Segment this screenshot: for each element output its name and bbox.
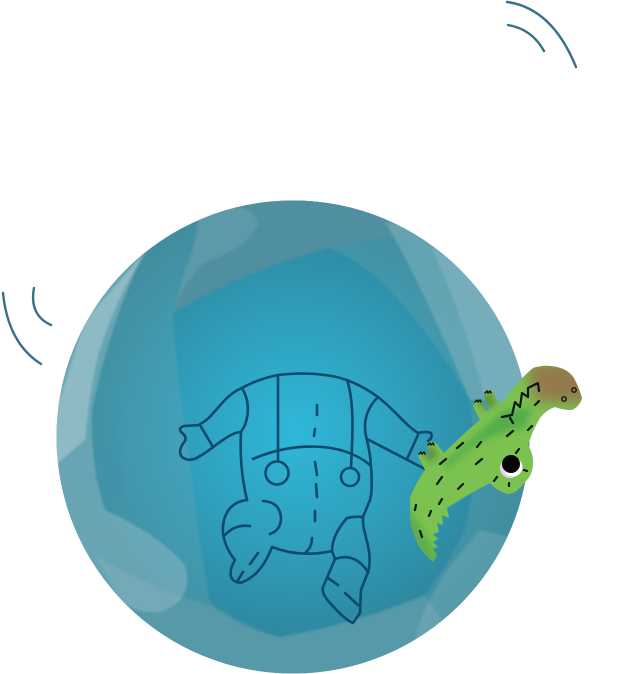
bubble sphere <box>50 195 540 674</box>
motion lines: top right <box>507 2 576 67</box>
baby figure outline <box>180 374 432 623</box>
crocodile eye <box>500 455 522 478</box>
torso and arms <box>200 374 418 433</box>
crocodile body <box>410 366 582 562</box>
crocodile <box>410 366 582 562</box>
watercolor layers <box>50 195 540 674</box>
crocodile markings <box>415 383 539 537</box>
nostrils <box>562 397 566 401</box>
shading <box>525 362 590 404</box>
right leg <box>332 517 370 573</box>
motion lines: left <box>3 288 51 364</box>
belly dashes <box>314 405 317 521</box>
belly <box>272 547 332 554</box>
left foot <box>223 500 272 583</box>
